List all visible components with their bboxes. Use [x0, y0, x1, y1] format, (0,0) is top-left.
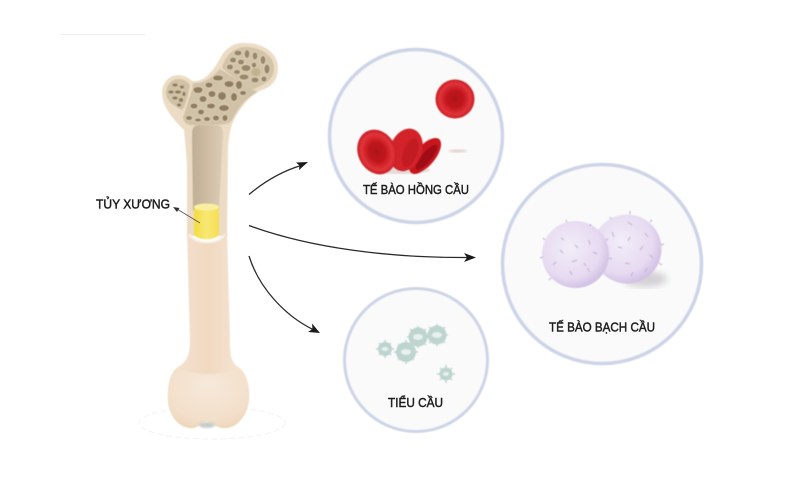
label: bone marrow: TỦY XƯƠNG: [96, 196, 170, 212]
circle: [330, 50, 502, 222]
bone shaft and lower condyle: [168, 232, 249, 428]
circle: [502, 164, 702, 364]
panel: red blood cells: [330, 50, 502, 222]
arrow: pointer to marrow: [173, 207, 200, 223]
clustered red cells: [350, 123, 447, 181]
lower condyle shading: [168, 367, 249, 428]
panel: platelets: [344, 288, 488, 432]
circle: [344, 288, 488, 432]
label: TẾ BÀO BẠCH CẦU: [549, 320, 655, 334]
label: TẾ BÀO HỒNG CẦU: [363, 182, 469, 197]
single red cell: [436, 80, 474, 118]
left white cell: [540, 220, 612, 288]
spongy bone: large head: [222, 47, 274, 90]
yellow bone marrow: [194, 204, 219, 239]
femoral head outer bone: [162, 43, 278, 236]
panel: white blood cells: [502, 164, 702, 364]
small mark at top: [60, 34, 145, 35]
arrow: to white blood cells: [249, 226, 476, 262]
arrow: to red blood cells: [249, 162, 308, 194]
cell shadow: [623, 271, 667, 287]
right white cell: [592, 211, 664, 284]
shadows: [449, 150, 467, 152]
ground shadow ellipse: [139, 407, 285, 439]
marrow cavity: [192, 125, 223, 210]
notch shadow: [199, 422, 215, 428]
platelet cluster: [376, 324, 455, 383]
arrow: to platelets: [249, 256, 320, 333]
label: TIỂU CẦU: [388, 395, 443, 410]
spongy bone: trochanter: [166, 79, 190, 110]
bone: [139, 43, 285, 439]
spongy bone: neck region: [183, 69, 257, 125]
cut edge of bone: [189, 234, 225, 242]
